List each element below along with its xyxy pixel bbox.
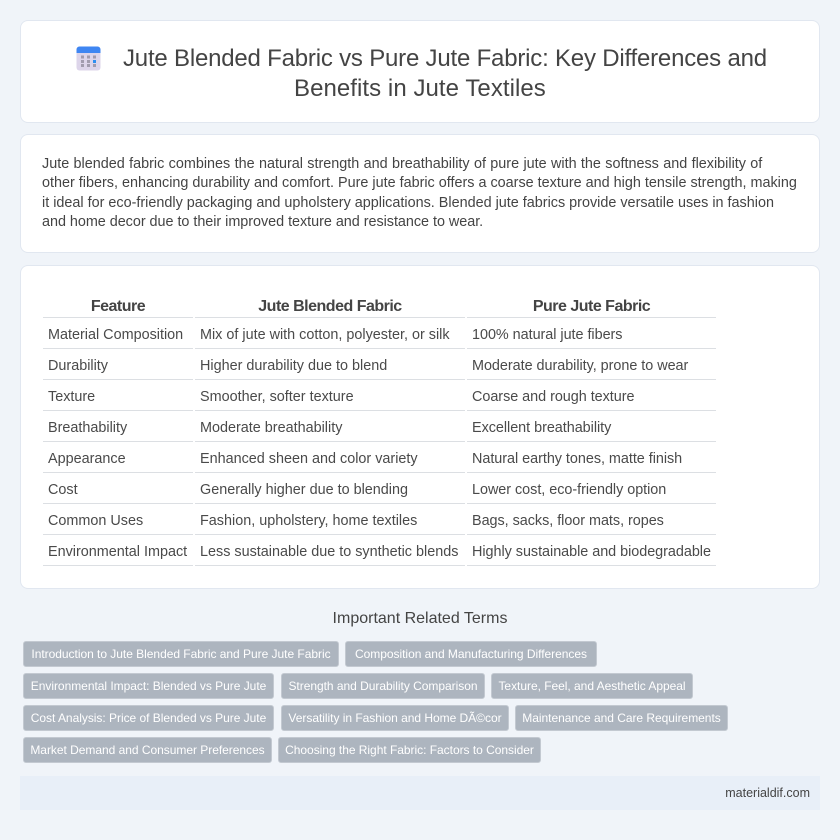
title bbox=[123, 45, 767, 102]
comparison table: Pure Jute Fabric bbox=[533, 298, 650, 315]
comparison table: Material Composition bbox=[48, 327, 183, 343]
panel: description bbox=[20, 134, 820, 253]
comparison table: Higher durability due to blend bbox=[200, 358, 387, 374]
comparison table: Enhanced sheen and color variety bbox=[200, 451, 418, 467]
description text bbox=[42, 156, 797, 230]
tag group: Introduction to Jute Blended Fabric and Pure Jute Fabric bbox=[31, 647, 331, 661]
comparison table: Breathability bbox=[48, 420, 127, 436]
comparison table: Cost bbox=[48, 482, 78, 498]
comparison table bbox=[43, 298, 716, 566]
comparison table: Generally higher due to blending bbox=[200, 482, 408, 498]
tag group: Versatility in Fashion and Home DÃ©cor bbox=[288, 711, 502, 725]
comparison table: Excellent breathability bbox=[472, 420, 611, 436]
comparison table: Moderate breathability bbox=[200, 420, 342, 436]
description text: and home decor due to their improved texture and resistance to wear. bbox=[42, 214, 483, 230]
comparison table: Durability bbox=[48, 358, 108, 374]
comparison table: Less sustainable due to synthetic blends bbox=[200, 544, 458, 560]
comparison table: Fashion, upholstery, home textiles bbox=[200, 513, 417, 529]
comparison table: Environmental Impact bbox=[48, 544, 187, 560]
description text: it ideal for eco-friendly packaging and upholstery applications. Blended jute fabrics provide versatile uses in fashion bbox=[42, 195, 774, 211]
comparison table: Coarse and rough texture bbox=[472, 389, 634, 405]
footer bar bbox=[20, 776, 820, 810]
comparison table: Jute Blended Fabric bbox=[258, 298, 402, 315]
comparison table: Highly sustainable and biodegradable bbox=[472, 544, 711, 560]
comparison table: Smoother, softer texture bbox=[200, 389, 354, 405]
comparison table: Common Uses bbox=[48, 513, 143, 529]
comparison table: Moderate durability, prone to wear bbox=[472, 358, 688, 374]
tag group: Texture, Feel, and Aesthetic Appeal bbox=[498, 679, 686, 693]
tag group: Strength and Durability Comparison bbox=[288, 679, 478, 693]
description text: other fibers, enhancing durability and comfort. Pure jute fabric offers a coarse texture and high tensile strength, making bbox=[42, 175, 797, 191]
comparison table: Bags, sacks, floor mats, ropes bbox=[472, 513, 664, 529]
title: Benefits in Jute Textiles bbox=[294, 75, 546, 102]
title: Jute Blended Fabric vs Pure Jute Fabric: Key Differences and bbox=[123, 45, 767, 72]
footer source text: materialdif.com bbox=[725, 786, 810, 800]
comparison table: Feature bbox=[91, 298, 145, 315]
tag group: Composition and Manufacturing Differences bbox=[355, 647, 587, 661]
panel: comparison table bbox=[20, 265, 820, 589]
comparison table: Texture bbox=[48, 389, 95, 405]
comparison table: 100% natural jute fibers bbox=[472, 327, 622, 343]
comparison table: Appearance bbox=[48, 451, 126, 467]
tag group: Cost Analysis: Price of Blended vs Pure Jute bbox=[31, 711, 266, 725]
tag group: Choosing the Right Fabric: Factors to Consider bbox=[285, 743, 534, 757]
description text: Jute blended fabric combines the natural strength and breathability of pure jute with the softness and flexibility of bbox=[42, 156, 762, 172]
tag group: Maintenance and Care Requirements bbox=[522, 711, 721, 725]
comparison table: Lower cost, eco-friendly option bbox=[472, 482, 666, 498]
title card bbox=[20, 20, 820, 123]
tag group bbox=[23, 641, 728, 763]
tag group: Environmental Impact: Blended vs Pure Jute bbox=[31, 679, 266, 693]
icon: calendar bbox=[76, 46, 100, 70]
comparison table: Natural earthy tones, matte finish bbox=[472, 451, 682, 467]
heading: important related terms: Important Related Terms bbox=[333, 610, 507, 627]
tag group: Market Demand and Consumer Preferences bbox=[30, 743, 265, 757]
comparison table: Mix of jute with cotton, polyester, or silk bbox=[200, 327, 450, 343]
